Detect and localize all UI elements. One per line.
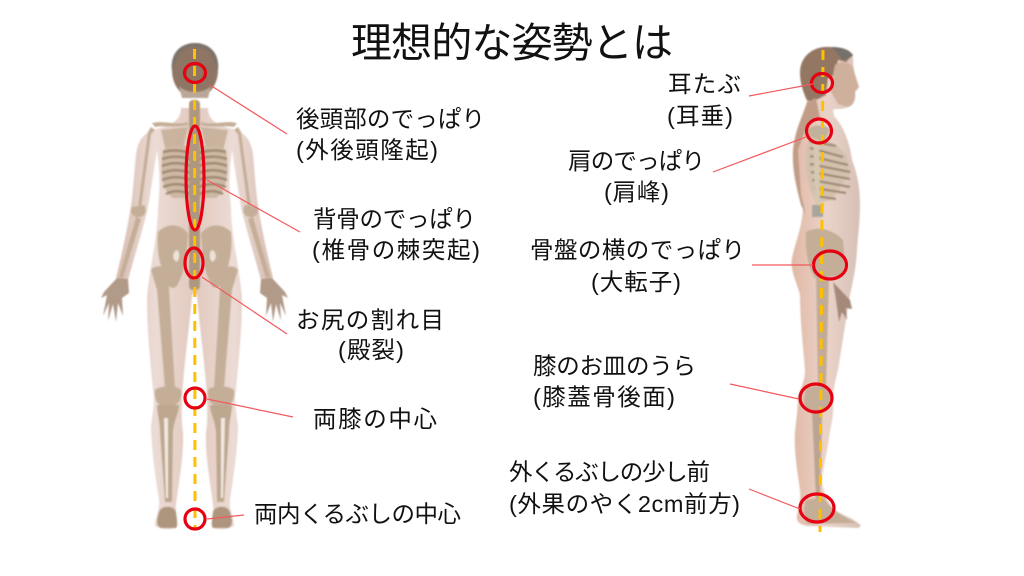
label: gluteal cleft [296, 307, 444, 363]
label: lateral malleolus [509, 459, 740, 517]
label: lateral malleolus: 外くるぶしの少し前 [509, 459, 710, 485]
label: acromion: (肩峰) [604, 179, 669, 205]
ring: gluteal cleft [185, 248, 203, 278]
figure: side view [792, 47, 861, 532]
label: acromion: 肩のでっぱり [568, 148, 705, 174]
title: 理想的な姿勢とは [351, 20, 673, 66]
ring: occiput [184, 64, 206, 82]
label: patella: (膝蓋骨後面) [533, 384, 675, 410]
label: occiput: 後頭部のでっぱり [296, 106, 485, 132]
label: greater trochanter: 骨盤の横のでっぱり [530, 237, 745, 263]
label: ankles: 両内くるぶしの中心 [254, 501, 461, 527]
figure: back view [101, 43, 288, 529]
label: earlobe: (耳垂) [667, 103, 733, 129]
label: occiput: (外後頭隆起) [296, 137, 438, 163]
label: patella: 膝のお皿のうら [533, 353, 696, 379]
ring: spine [186, 126, 204, 230]
label: acromion [568, 148, 705, 205]
label: occiput [296, 106, 485, 163]
ring: ankles [185, 509, 205, 529]
callout lines: back view [202, 85, 300, 519]
ring: knees [185, 388, 205, 408]
ring: lateral malleolus [800, 494, 834, 522]
label: spine [312, 206, 480, 263]
label: knees: 両膝の中心 [313, 406, 437, 432]
body and skeleton [101, 43, 288, 529]
label: lateral malleolus: (外果のやく2cm前方) [509, 491, 740, 517]
ring: knee [800, 384, 832, 412]
label: greater trochanter [530, 237, 745, 295]
label: greater trochanter: (大転子) [591, 269, 681, 295]
label: spine: (椎骨の棘突起) [312, 237, 480, 263]
callout lines: side view [713, 84, 813, 509]
plumb line [193, 49, 196, 528]
ring: earlobe [812, 74, 832, 92]
label: patella [533, 353, 696, 410]
plumb line [820, 50, 823, 532]
label: gluteal cleft: お尻の割れ目 [296, 307, 444, 333]
ring: acromion [806, 119, 832, 143]
ring: greater trochanter [814, 251, 846, 279]
label: earlobe [667, 71, 741, 129]
label: earlobe: 耳たぶ [668, 71, 741, 97]
label: gluteal cleft: (殿裂) [338, 337, 404, 363]
body and skeleton [792, 47, 861, 528]
label: spine: 背骨のでっぱり [313, 206, 476, 232]
